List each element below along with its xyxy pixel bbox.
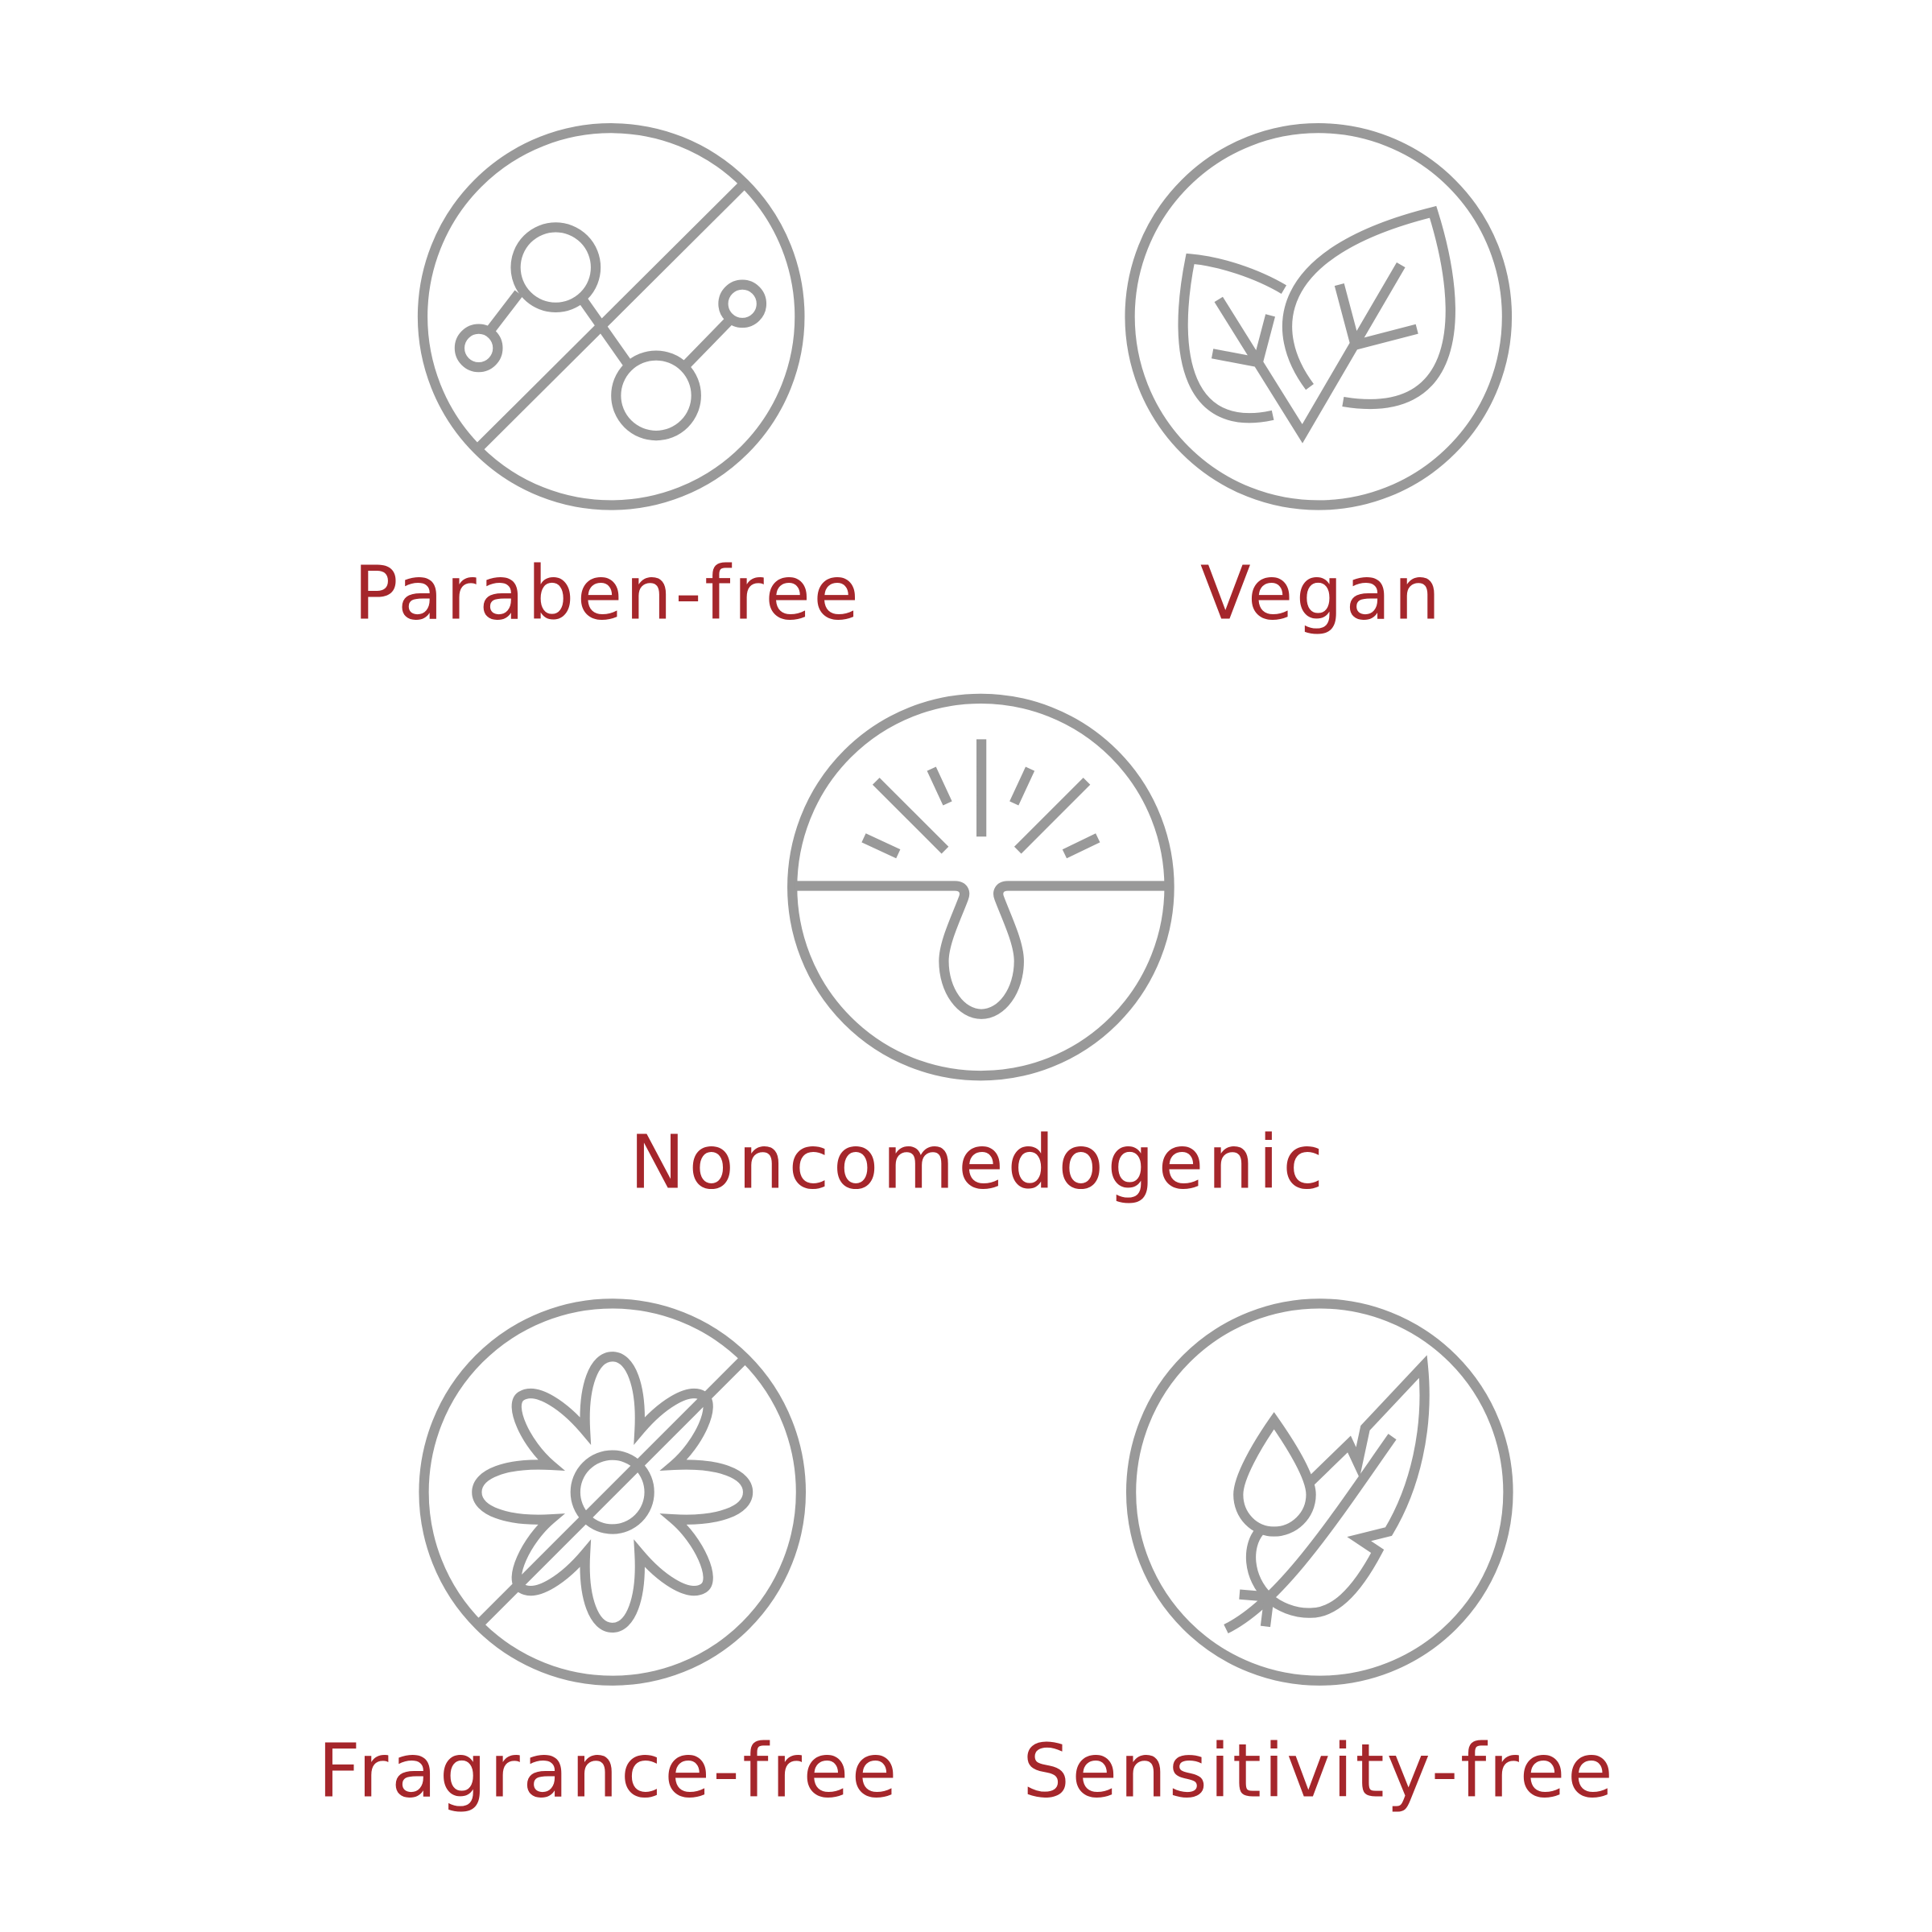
icon: vegan leaves [1130,128,1507,506]
panel: paraben-free [353,128,859,636]
icon: flower crossed out [424,1303,801,1681]
panel: fragrance-free [318,1303,897,1814]
panel: sensitivity-free [1022,1303,1613,1814]
label: Sensitivity-free: Sensitivity-free [1022,1728,1613,1814]
label: Paraben-free: Paraben-free [353,550,859,636]
panel: noncomedogenic [630,699,1323,1206]
label: Vegan: Vegan [1200,550,1440,636]
label: Noncomedogenic: Noncomedogenic [630,1120,1323,1206]
icon: paraben molecule crossed out [423,128,799,506]
icon: feather with drop [1131,1303,1508,1681]
label: Fragrance-free: Fragrance-free [318,1728,897,1814]
icon: clear pore with rays [792,699,1170,1075]
panel: vegan [1130,128,1507,636]
